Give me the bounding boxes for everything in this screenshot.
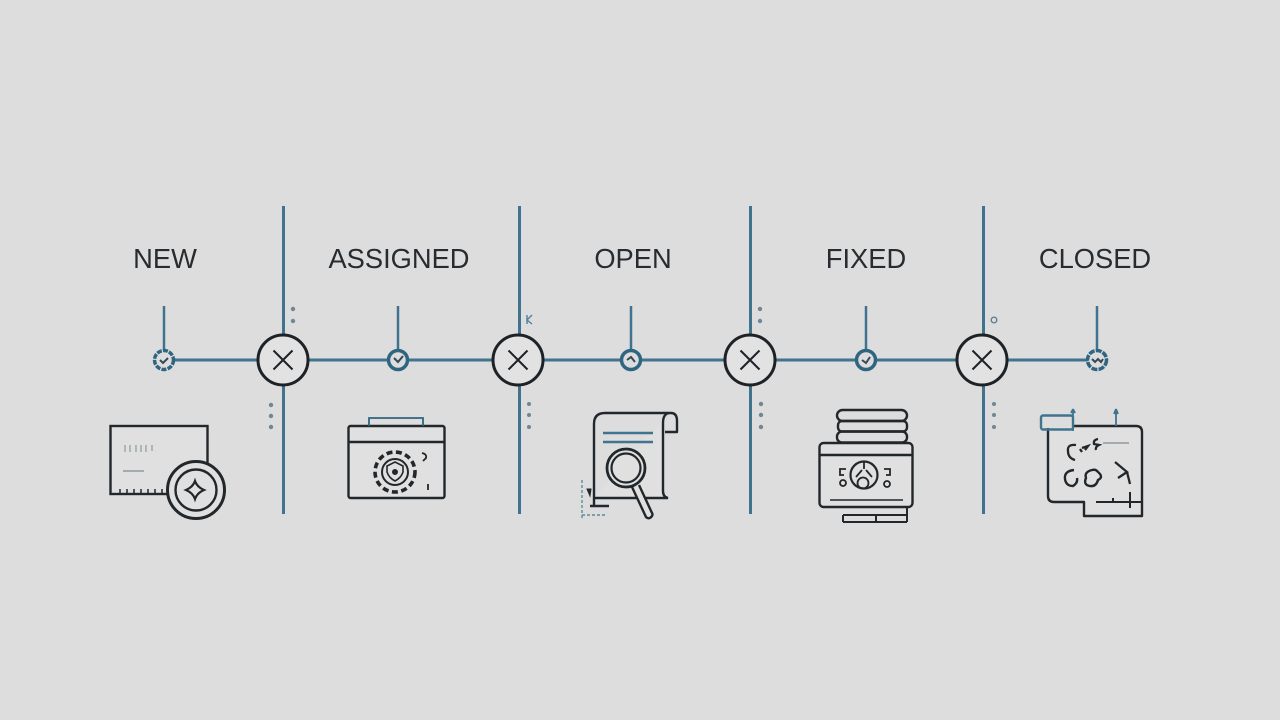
node: NEW	[154, 350, 174, 370]
marker 2	[493, 335, 543, 385]
icon: OPEN document with magnifier	[582, 413, 677, 518]
marker 1	[258, 335, 308, 385]
node: OPEN	[622, 350, 640, 370]
label: CLOSED: CLOSED	[1039, 243, 1151, 274]
node: CLOSED	[1088, 350, 1106, 370]
node: FIXED	[856, 350, 876, 370]
icon: NEW ticket with badge	[110, 426, 224, 518]
marker 3	[725, 335, 775, 385]
node: ASSIGNED	[388, 350, 408, 370]
icon: CLOSED map with route	[1041, 409, 1142, 516]
label: NEW: NEW	[133, 243, 197, 274]
icon: ASSIGNED case with gear	[348, 418, 444, 498]
marker 4	[957, 335, 1007, 385]
stage nodes	[154, 350, 1106, 370]
label: FIXED: FIXED	[826, 243, 906, 274]
icon: FIXED books on monitor	[820, 410, 912, 522]
label: ASSIGNED: ASSIGNED	[328, 243, 470, 274]
stage labels	[133, 243, 1151, 274]
label: OPEN: OPEN	[594, 243, 672, 274]
small dot annotations	[269, 307, 997, 429]
transition markers	[258, 335, 1007, 385]
timeline connector lines	[164, 206, 1097, 514]
